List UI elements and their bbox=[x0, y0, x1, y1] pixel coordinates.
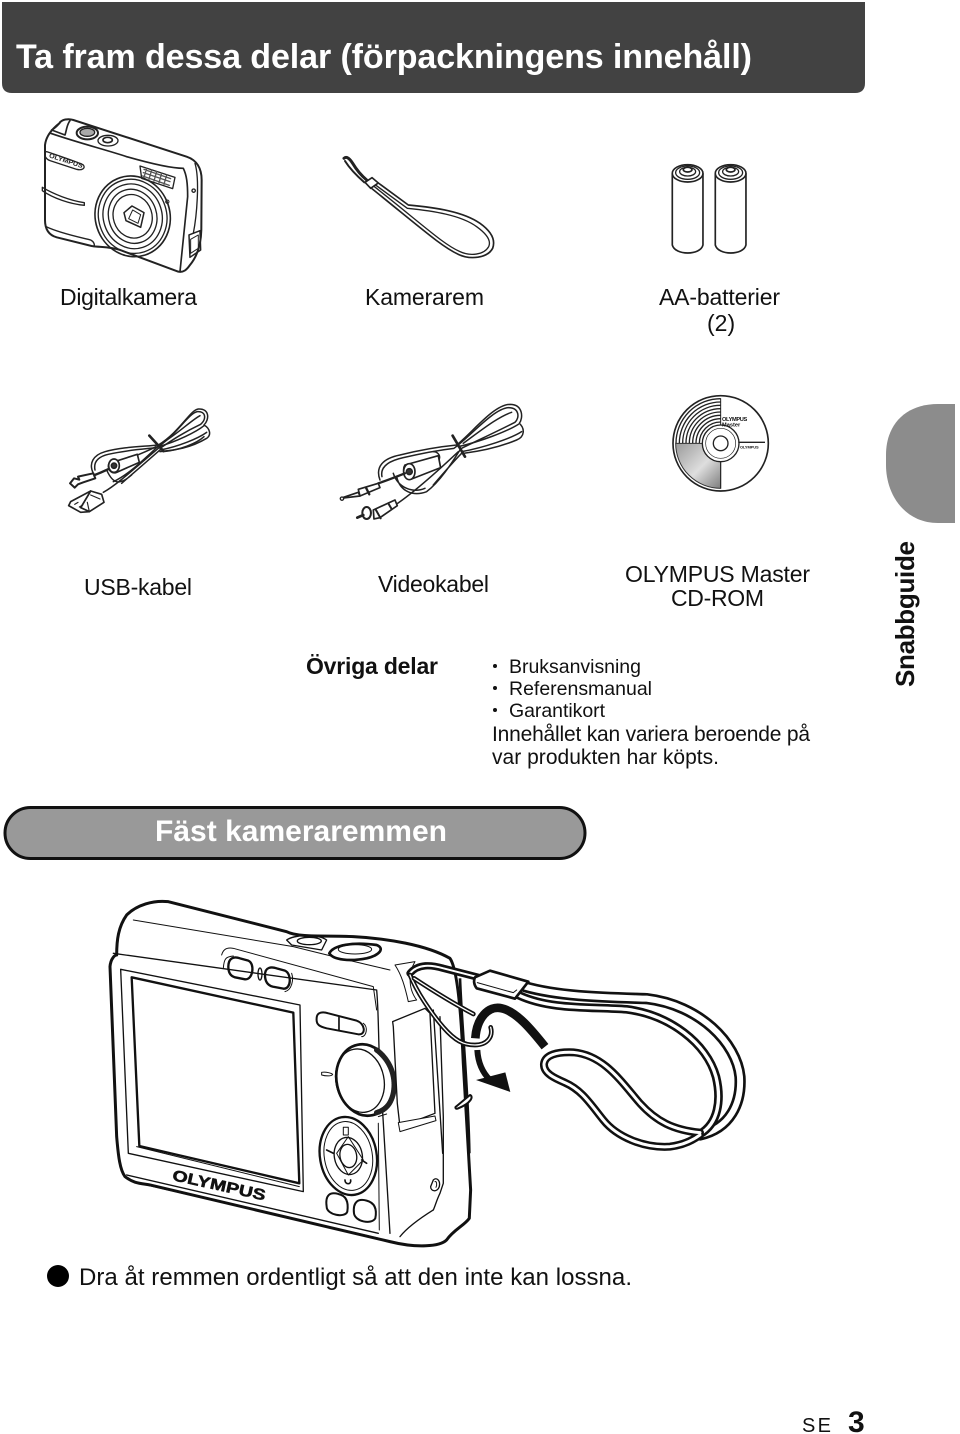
icon: AA batteries bbox=[672, 165, 746, 253]
label: Digitalkamera: Digitalkamera bbox=[60, 284, 197, 310]
label: AA-batterier (2): AA-batterier bbox=[659, 284, 780, 310]
label: AA-batterier (2): (2) bbox=[707, 310, 735, 336]
label: USB-kabel: USB-kabel bbox=[84, 574, 192, 600]
title text: Ta fram dessa delar (förpackningens innehåll) bbox=[16, 38, 752, 76]
bullet list and note: Referensmanual bbox=[509, 678, 652, 700]
icon: digital camera bbox=[42, 119, 202, 272]
icon: video cable bbox=[340, 404, 523, 519]
threading path highlight bbox=[475, 1008, 545, 1047]
bullet list and note: var produkten har köpts. bbox=[492, 746, 719, 769]
bullet list and note bbox=[492, 656, 810, 769]
instruction with bullet: Dra åt remmen ordentligt så att den inte kan lossna. bbox=[79, 1264, 632, 1291]
icon: CD-ROM: OLYMPUS bbox=[722, 417, 748, 423]
label: OLYMPUS Master CD-ROM: CD-ROM bbox=[671, 585, 764, 611]
section heading pill: Fäst kameraremmen bbox=[155, 815, 447, 848]
page number bbox=[802, 1406, 865, 1434]
camera back bbox=[110, 901, 471, 1246]
bullet list and note: Garantikort bbox=[509, 700, 606, 722]
icon: digital camera: OLYMPUS bbox=[48, 153, 84, 170]
label: OLYMPUS Master CD-ROM bbox=[625, 561, 810, 611]
label: Kamerarem: Kamerarem bbox=[365, 284, 484, 310]
side label: Snabbguide: Snabbguide bbox=[890, 541, 920, 687]
icon: small wrist strap bbox=[344, 157, 494, 258]
wrist strap looped through eyelet bbox=[410, 966, 740, 1153]
icon: USB cable bbox=[69, 409, 210, 512]
bullet list and note: Bruksanvisning bbox=[509, 656, 641, 678]
side tab bbox=[886, 404, 955, 523]
icon: CD-ROM: Master bbox=[722, 422, 741, 428]
label: AA-batterier (2) bbox=[659, 284, 780, 336]
icon: CD-ROM: OLYMPUS bbox=[740, 444, 759, 449]
label: OLYMPUS Master CD-ROM: OLYMPUS Master bbox=[625, 561, 810, 587]
bullet list and note: Innehållet kan variera beroende på bbox=[492, 723, 810, 746]
illustration: camera back with strap bbox=[110, 901, 740, 1246]
icon: CD-ROM bbox=[673, 396, 768, 491]
section heading pill bbox=[5, 808, 585, 858]
arrow: pull strap tight bbox=[476, 1050, 510, 1092]
camera back: OLYMPUS bbox=[171, 1167, 267, 1204]
heading: Övriga delar: Övriga delar bbox=[306, 653, 438, 679]
title banner bbox=[2, 2, 865, 93]
label: Videokabel: Videokabel bbox=[378, 571, 489, 597]
